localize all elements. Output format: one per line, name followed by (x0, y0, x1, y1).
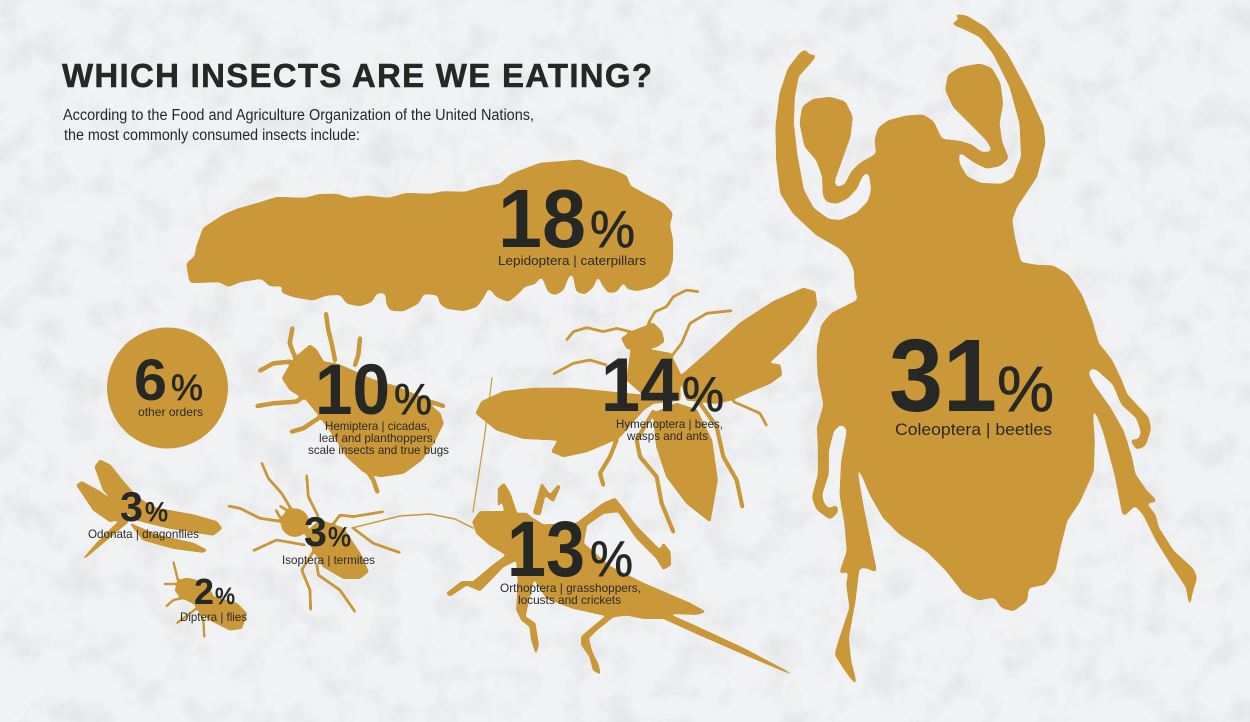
value 2%: % (215, 583, 235, 609)
label: Lepidoptera | caterpillars (498, 253, 647, 268)
value 2%: 2 (194, 571, 214, 612)
value 6% (134, 348, 203, 413)
label (500, 581, 641, 607)
label: other orders (138, 405, 203, 419)
value 31%: 31 (889, 318, 997, 433)
label: wasps and ants (626, 429, 708, 443)
icon: cicada (257, 314, 443, 492)
value 18%: 18 (498, 172, 586, 265)
icon: beetle (776, 13, 1197, 687)
icon: fly (164, 562, 247, 637)
label: leaf and planthoppers, (319, 431, 436, 445)
icon: grasshopper (352, 378, 795, 676)
icon: dragonfly (77, 460, 222, 559)
value 10%: 10 (315, 351, 390, 430)
value 10% (315, 351, 432, 430)
value 6%: 6 (134, 348, 167, 413)
value 3% (120, 483, 168, 530)
intro text (63, 107, 534, 144)
label: scale insects and true bugs (308, 443, 449, 457)
value 13%: 13 (507, 504, 585, 593)
panel: diptera 2% (164, 562, 247, 637)
value 13% (507, 504, 633, 593)
value 18%: % (590, 201, 635, 259)
icon: circle (107, 328, 228, 448)
value 14%: 14 (601, 343, 679, 428)
label: Coleoptera | beetles (895, 421, 1052, 439)
icon: caterpillar (187, 160, 673, 311)
label: Isoptera | termites (282, 553, 375, 567)
panel: other orders 6% (107, 328, 228, 448)
label: Odonata | dragonflies (88, 527, 199, 541)
label (308, 419, 449, 457)
label: Hymenoptera | bees, (616, 417, 723, 431)
panel: hymenoptera 14% (476, 288, 817, 532)
value 3%: 3 (304, 508, 327, 555)
value 3% (304, 508, 351, 555)
value 31%: % (997, 353, 1054, 425)
value 2% (194, 571, 235, 612)
value 14% (601, 343, 724, 428)
value 31% (889, 318, 1054, 433)
value 14%: % (682, 368, 724, 422)
value 3%: % (328, 522, 351, 552)
value 3%: % (145, 497, 168, 527)
label: locusts and crickets (518, 593, 621, 607)
panel: odonata 3% (77, 460, 222, 559)
label: Hemiptera | cicadas, (325, 419, 430, 433)
panel: caterpillar 18% (187, 160, 673, 311)
value 10%: % (394, 375, 432, 424)
panel: hemiptera 10% (257, 314, 449, 492)
title: WHICH INSECTS ARE WE EATING? (62, 57, 652, 94)
label: Orthoptera | grasshoppers, (500, 581, 641, 595)
label: Diptera | flies (180, 610, 247, 624)
panel: coleoptera 31% (776, 13, 1197, 687)
panel: isoptera 3% (228, 463, 400, 612)
label (616, 417, 723, 443)
panel: orthoptera 13% (352, 378, 795, 676)
value 6%: % (171, 367, 203, 408)
icon: wasp (476, 288, 817, 532)
value 18% (498, 172, 635, 265)
icon: termite (228, 463, 400, 612)
value 3%: 3 (120, 483, 143, 530)
intro text: the most commonly consumed insects include: (64, 127, 360, 144)
value 13%: % (590, 531, 633, 587)
intro text: According to the Food and Agriculture Organization of the United Nations, (63, 107, 534, 124)
